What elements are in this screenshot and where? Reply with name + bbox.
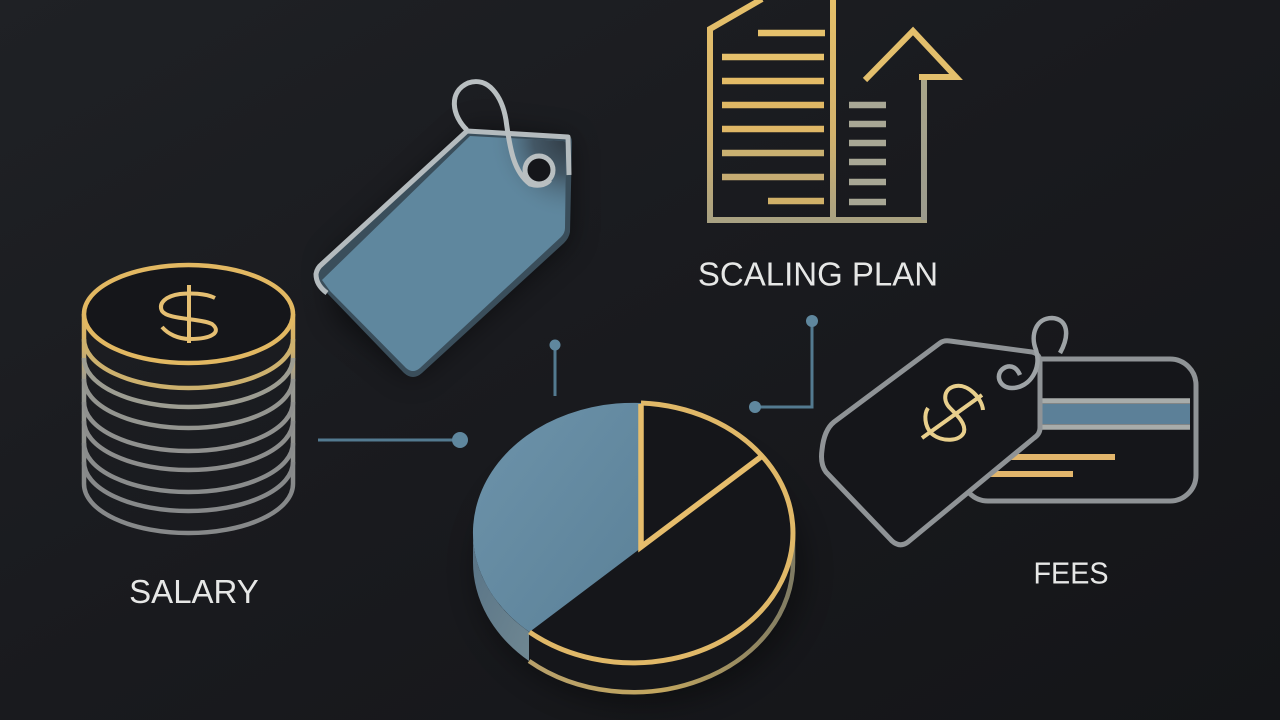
pie blue sector (473, 403, 641, 632)
growth arrow (865, 31, 956, 220)
connector: right elbow (749, 315, 818, 413)
label: scaling plan: SCALING PLAN (698, 256, 938, 292)
pie gold outline (530, 403, 793, 663)
pie wedge (641, 404, 762, 547)
coin top (84, 265, 293, 363)
icon: dollar price tag (822, 318, 1066, 545)
dollar sign on tag (922, 386, 983, 440)
tag hole and string (454, 82, 553, 185)
dollar sign on coin (161, 285, 216, 343)
icon: building with growth arrow (707, 0, 956, 222)
chart: pie chart (473, 403, 805, 705)
icon: credit card (962, 359, 1196, 501)
connector: left (318, 432, 468, 448)
icon: coin stack (84, 265, 293, 533)
connector: top centre (550, 340, 560, 396)
card stripe (1042, 404, 1190, 424)
label: salary: SALARY (129, 573, 259, 610)
label: fees: FEES (1034, 556, 1108, 590)
card lines (1010, 454, 1115, 460)
tag hole and string (999, 318, 1066, 388)
icon: blue price tag (316, 82, 572, 378)
pie base (473, 533, 793, 691)
pie shadow (475, 435, 805, 705)
pie top dark (473, 403, 793, 663)
building lines (722, 33, 886, 202)
